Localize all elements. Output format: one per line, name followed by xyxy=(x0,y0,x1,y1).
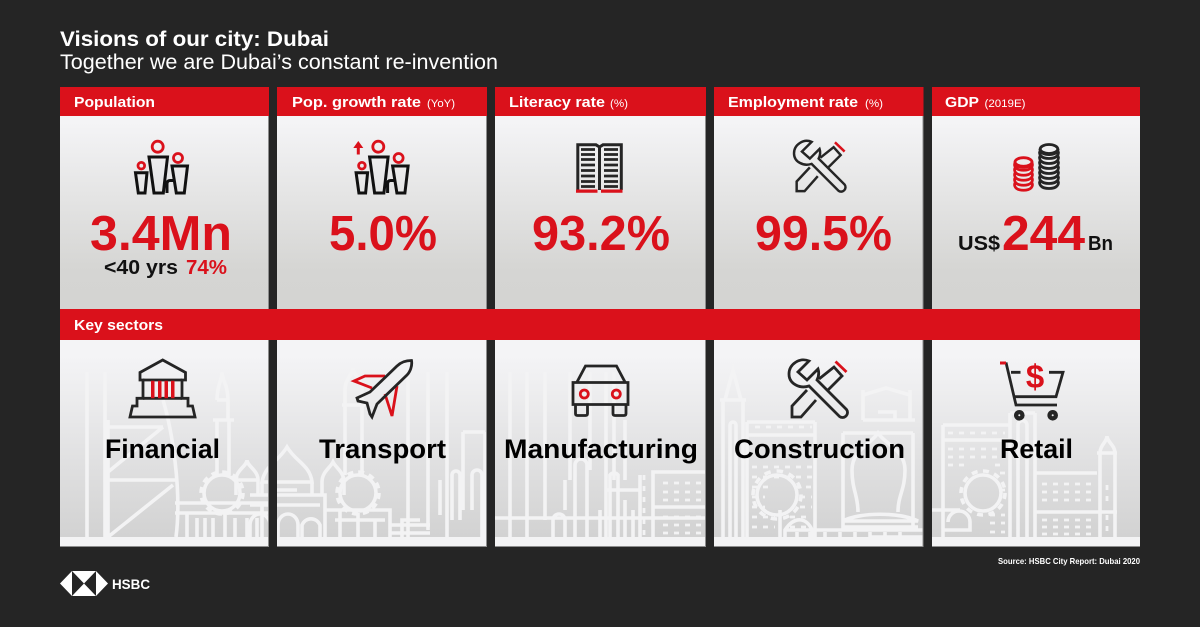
sector: construction xyxy=(734,360,905,464)
panel: literacy rate: Literacy rate xyxy=(509,94,605,111)
panel: GDP: (2019E) xyxy=(984,98,1026,110)
HSBC logo: HSBC xyxy=(112,576,150,592)
GDP value xyxy=(958,207,1113,261)
panel: population growth rate: 5.0% xyxy=(329,207,437,261)
GDP value: 244 xyxy=(1002,207,1085,261)
panel: literacy rate: (%) xyxy=(610,98,628,110)
sector: transport: Transport xyxy=(319,434,446,464)
panel: GDP: GDP xyxy=(945,94,979,111)
panel: employment rate: 99.5% xyxy=(755,207,892,261)
icon: wrench and pencil xyxy=(789,360,848,418)
panel: population xyxy=(60,87,269,309)
sector: financial xyxy=(105,360,220,464)
panel: employment rate xyxy=(714,87,924,309)
icon: shopping cart: $ xyxy=(1026,358,1044,395)
panel: population growth rate: Pop. growth rate xyxy=(292,94,421,111)
panel: population: 3.4Mn xyxy=(90,207,232,261)
title xyxy=(60,28,498,74)
panel: literacy rate xyxy=(495,87,706,309)
icon: open book xyxy=(576,145,622,193)
GDP value: US$ xyxy=(958,233,1000,255)
icon: people with up arrow xyxy=(353,141,408,193)
sector: retail xyxy=(1000,358,1073,464)
sector: retail: Retail xyxy=(1000,434,1073,464)
title: Together we are Dubai’s constant re-invention xyxy=(60,51,498,74)
panel: population: Population xyxy=(74,94,155,111)
HSBC logo xyxy=(60,571,150,596)
icon: car xyxy=(573,366,628,416)
panel: population growth rate: (YoY) xyxy=(427,98,455,110)
sector: manufacturing: Manufacturing xyxy=(504,434,698,464)
panel: population: 74% xyxy=(186,257,227,279)
panel: GDP xyxy=(932,87,1140,309)
sector: financial: Financial xyxy=(105,434,220,464)
icon: plane xyxy=(354,360,412,417)
panel: employment rate: Employment rate xyxy=(728,94,858,111)
sector: manufacturing xyxy=(504,366,698,464)
sector: construction: Construction xyxy=(734,434,905,464)
GDP value: Bn xyxy=(1088,233,1113,255)
source note: Source: HSBC City Report: Dubai 2020 xyxy=(998,556,1140,566)
icon: wrench and pencil xyxy=(794,141,846,192)
under 40 share: <40 yrs xyxy=(104,257,178,279)
key sectors bar: Key sectors xyxy=(74,317,163,334)
title: Visions of our city: Dubai xyxy=(60,28,329,51)
icon: people xyxy=(136,141,188,193)
lower panels background xyxy=(60,340,1140,547)
sector: transport xyxy=(319,360,446,464)
key sectors bar xyxy=(60,309,1140,340)
panel: population growth rate xyxy=(277,87,487,309)
icon: bank xyxy=(130,360,195,417)
skyline illustration xyxy=(85,404,1117,537)
icon: coin stacks xyxy=(1015,144,1058,190)
panel: literacy rate: 93.2% xyxy=(532,207,670,261)
panel: employment rate: (%) xyxy=(865,98,883,110)
